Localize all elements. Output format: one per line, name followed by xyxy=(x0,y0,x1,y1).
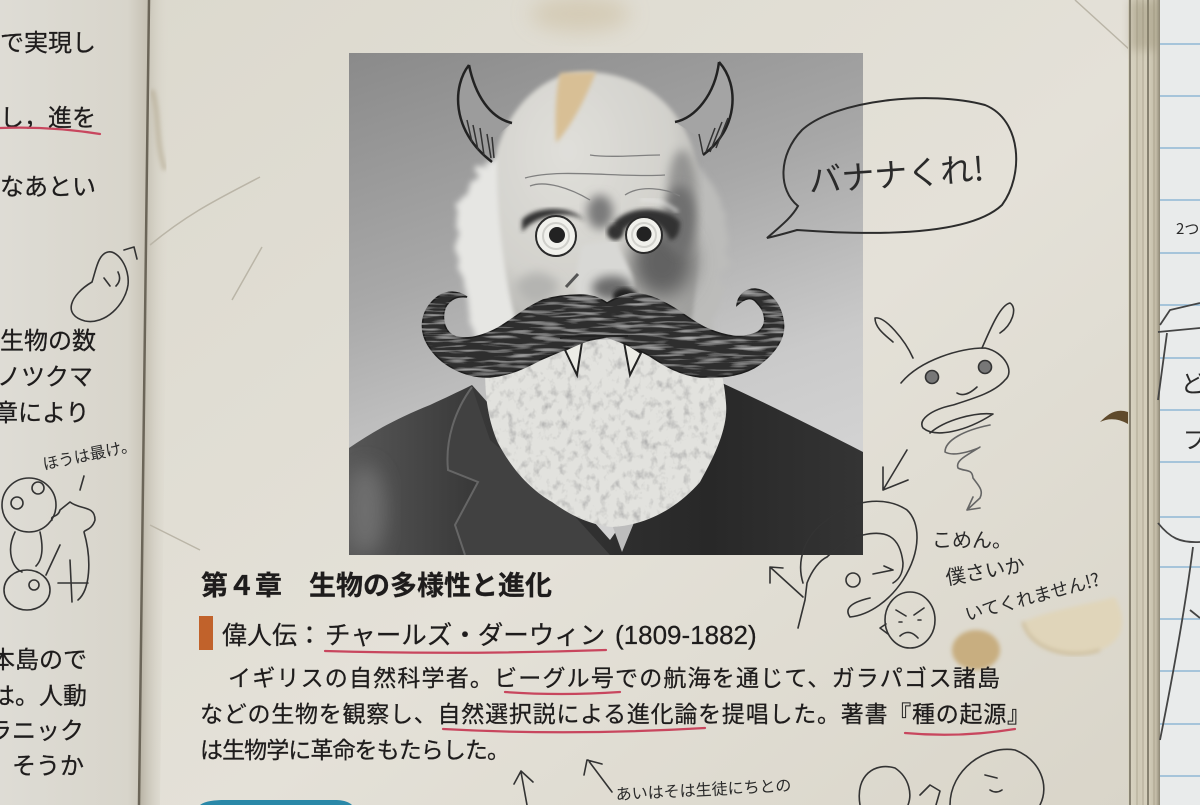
biography body text: イギリスの自然科学者。ビーグル号での航海を通じて、ガラパゴス諸島 xyxy=(228,665,1000,691)
handwritten apology note xyxy=(932,524,1103,627)
notebook on the right: 2つ xyxy=(1176,218,1199,239)
horn: right xyxy=(675,62,733,155)
biography heading xyxy=(222,620,757,650)
handwritten apology note: こめん。 xyxy=(932,524,1012,553)
handwritten apology note: いてくれません!? xyxy=(962,566,1103,627)
doodle: arrow to face xyxy=(883,450,908,490)
horn: left xyxy=(458,65,512,162)
coat xyxy=(345,383,863,555)
gutter shadow and spine line xyxy=(138,0,170,805)
left page xyxy=(0,0,150,805)
white hair left xyxy=(452,154,516,336)
page paper stains and creases xyxy=(150,0,1130,670)
doodle: rabbit creature xyxy=(875,303,1014,510)
dark shading right of nose xyxy=(630,226,694,298)
forehead wrinkles xyxy=(525,155,680,200)
left page printed text: なあとい xyxy=(0,174,96,201)
grey hair right xyxy=(698,167,724,252)
left page printed text: 生物の数 xyxy=(0,328,96,355)
eye: left xyxy=(536,216,576,256)
speech bubble xyxy=(767,98,1016,238)
eye sockets and brows xyxy=(522,200,680,240)
left page printed text: し，進を xyxy=(0,105,96,132)
speech bubble: バナナくれ! xyxy=(807,142,985,202)
portrait photograph xyxy=(345,53,863,555)
orange marker xyxy=(199,616,213,650)
doodle: face xyxy=(770,501,917,628)
left page printed text: で実現し xyxy=(0,30,96,57)
nose xyxy=(575,240,634,301)
beard xyxy=(485,335,726,527)
eye: right xyxy=(626,217,662,253)
bottom arrows and scribble: あいはそは生徒にちとの xyxy=(615,772,792,805)
biography heading: チャールズ・ダーウィン xyxy=(325,622,605,650)
biography body text: は生物学に革命をもたらした。 xyxy=(200,737,510,763)
doodle: angry small face xyxy=(880,592,935,648)
left cheek shade xyxy=(515,272,560,304)
handwritten apology note: 僕さいか xyxy=(943,548,1027,591)
photo backdrop xyxy=(349,53,863,555)
biography heading: 偉人伝： xyxy=(222,622,322,650)
blue panel edge at page bottom xyxy=(200,800,352,805)
biography body text: などの生物を観察し、自然選択説による進化論を提唱した。著書『種の起源』 xyxy=(200,701,1030,727)
red pen underlines xyxy=(325,650,1015,735)
page stack edge xyxy=(1100,0,1160,805)
tan stain on the forehead xyxy=(555,72,596,143)
biography heading: (1809-1882) xyxy=(615,620,757,650)
head and face xyxy=(497,72,700,335)
moustache xyxy=(422,289,784,377)
bottom arrows and scribble xyxy=(514,749,1044,805)
left page printed text: そうか xyxy=(12,753,84,780)
left page printed text xyxy=(0,30,100,780)
fangs xyxy=(565,342,641,375)
left page doodles: ほうは最け。 xyxy=(40,432,138,475)
brow furrow xyxy=(587,195,613,229)
notebook on the right xyxy=(1158,0,1200,805)
left page doodles xyxy=(2,247,138,610)
biography body text xyxy=(200,665,1030,763)
chapter heading: 第４章 生物の多様性と進化 xyxy=(201,571,552,601)
